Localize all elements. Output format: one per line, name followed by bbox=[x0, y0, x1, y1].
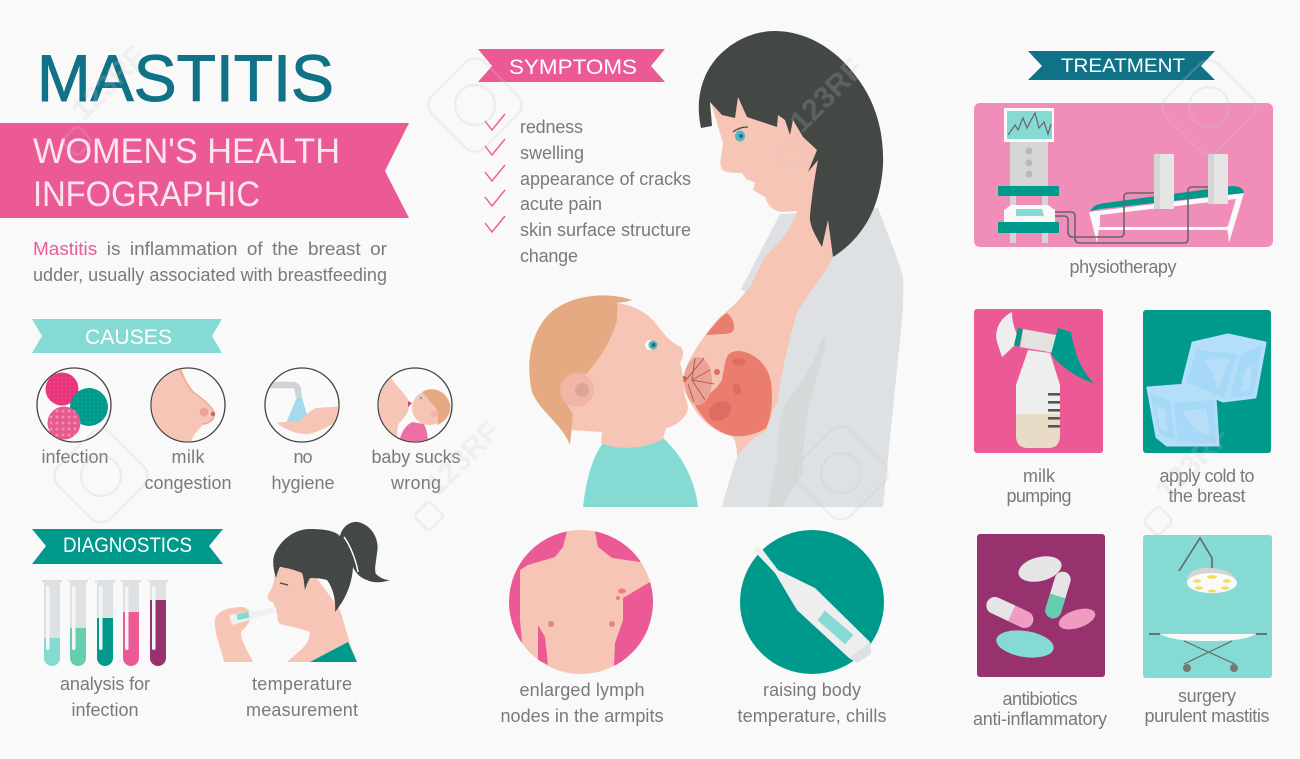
tubes bbox=[1055, 187, 1208, 243]
analysis label bbox=[60, 674, 150, 720]
hair bbox=[699, 31, 883, 257]
ribbon: symptoms: SYMPTOMS bbox=[509, 56, 637, 79]
temperature label bbox=[246, 674, 358, 720]
temperature label: measurement bbox=[246, 700, 358, 720]
bottom labels bbox=[500, 680, 886, 726]
banner: women's health infographic: WOMEN'S HEALTH bbox=[33, 132, 340, 171]
machine bbox=[998, 108, 1059, 243]
panel: antibiotics bbox=[977, 534, 1105, 677]
ribbon: treatment: TREATMENT bbox=[1061, 56, 1185, 77]
bottom labels: temperature, chills bbox=[738, 706, 886, 726]
lymph nodes circle bbox=[509, 530, 653, 674]
panel: milk pumping bbox=[974, 309, 1103, 453]
lamp bbox=[1179, 538, 1237, 593]
eye bbox=[733, 127, 748, 142]
ear bbox=[560, 373, 594, 407]
symptom list: change bbox=[520, 246, 578, 266]
test tubes bbox=[42, 580, 168, 666]
baby bbox=[529, 295, 698, 507]
watermarks: 123RF bbox=[420, 415, 507, 502]
ice cube: bottom bbox=[1148, 385, 1218, 445]
milk pumping label: pumping bbox=[1006, 486, 1072, 506]
table bbox=[1089, 186, 1244, 243]
apply cold label: apply cold to bbox=[1160, 466, 1254, 486]
mother breastfeeding bbox=[681, 31, 903, 507]
icon: baby sucks wrong bbox=[370, 368, 452, 445]
causes icons bbox=[36, 367, 453, 443]
skin: face, neck and chest bbox=[683, 80, 850, 457]
hair bbox=[529, 295, 632, 445]
watermarks: 123RF bbox=[1150, 420, 1237, 507]
analysis label: analysis for bbox=[60, 674, 150, 694]
intro text: Mastitis is inflammation of the breast or bbox=[33, 239, 387, 259]
apply cold label: the breast bbox=[1168, 486, 1246, 506]
ribbon: causes bbox=[32, 319, 222, 353]
girl with thermometer bbox=[215, 522, 390, 662]
apply cold label bbox=[1160, 466, 1254, 506]
causes labels: no bbox=[294, 447, 312, 467]
symptoms checklist bbox=[485, 114, 691, 266]
causes labels: hygiene bbox=[272, 473, 334, 493]
ribbon: causes: CAUSES bbox=[85, 326, 172, 349]
panel: apply cold bbox=[1143, 310, 1271, 453]
thermometer circle bbox=[740, 530, 884, 674]
panel: physiotherapy bbox=[974, 103, 1273, 247]
robe bbox=[722, 208, 903, 507]
symptom list: appearance of cracks bbox=[520, 169, 691, 189]
symptom list: redness bbox=[520, 117, 583, 137]
check marks bbox=[485, 114, 505, 232]
icon: infection bbox=[37, 368, 111, 442]
panel: surgery bbox=[1143, 535, 1272, 678]
causes labels: congestion bbox=[144, 473, 232, 493]
symptom list: skin surface structure bbox=[520, 220, 691, 240]
milk pumping label: milk bbox=[1023, 466, 1056, 486]
temperature label: temperature bbox=[252, 674, 352, 694]
surgery label: surgery bbox=[1178, 686, 1236, 706]
breast inflammation bbox=[681, 313, 772, 436]
watermarks: 123RF bbox=[66, 40, 153, 127]
antibiotics label: antibiotics bbox=[1002, 689, 1078, 709]
bottom labels: raising body bbox=[763, 680, 861, 700]
symptom list bbox=[520, 117, 691, 266]
bottom labels: nodes in the armpits bbox=[500, 706, 664, 726]
symptom list: swelling bbox=[520, 143, 584, 163]
icon: no hygiene bbox=[265, 368, 345, 442]
analysis label: infection bbox=[72, 700, 138, 720]
shirt bbox=[583, 438, 698, 507]
eye bbox=[645, 340, 658, 350]
watermarks: 123RF bbox=[784, 52, 871, 139]
surgery label bbox=[1144, 686, 1270, 726]
antibiotics label bbox=[973, 689, 1107, 729]
causes labels: wrong bbox=[390, 473, 441, 493]
stretcher bbox=[1149, 634, 1267, 672]
physiotherapy label: physiotherapy bbox=[1070, 257, 1176, 277]
milk pumping label bbox=[1006, 466, 1072, 506]
causes labels: baby sucks bbox=[372, 447, 460, 467]
ribbon: diagnostics bbox=[32, 529, 223, 564]
icon: milk congestion bbox=[150, 360, 225, 445]
banner: women's health infographic: INFOGRAPHIC bbox=[33, 175, 260, 214]
symptom list: acute pain bbox=[520, 194, 602, 214]
bottom labels: enlarged lymph bbox=[520, 680, 644, 700]
ribbon: symptoms bbox=[478, 49, 665, 82]
head bbox=[560, 303, 688, 448]
surgery label: purulent mastitis bbox=[1144, 706, 1270, 726]
cuffs bbox=[1154, 154, 1228, 209]
causes labels: milk bbox=[172, 447, 206, 467]
causes labels: infection bbox=[42, 447, 108, 467]
intro text bbox=[33, 239, 387, 285]
causes labels bbox=[42, 447, 460, 493]
ice cube: top bbox=[1183, 335, 1265, 401]
title: MASTITIS bbox=[37, 41, 334, 115]
intro text: udder, usually associated with breastfeeding bbox=[33, 265, 387, 285]
ribbon: diagnostics: DIAGNOSTICS bbox=[63, 534, 192, 557]
watermarks bbox=[49, 40, 1261, 537]
ribbon: treatment bbox=[1028, 51, 1215, 80]
antibiotics label: anti-inflammatory bbox=[973, 709, 1107, 729]
banner: women's health infographic bbox=[0, 123, 409, 218]
